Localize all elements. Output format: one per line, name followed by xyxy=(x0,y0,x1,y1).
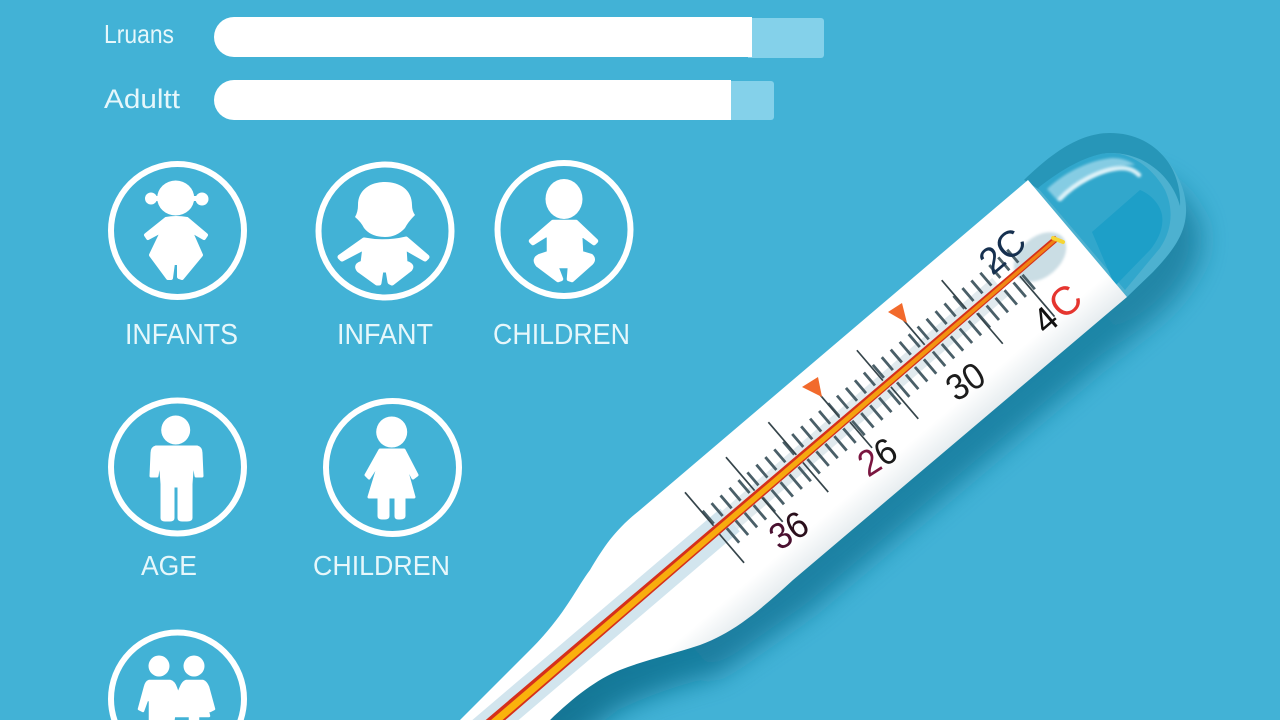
bar fill xyxy=(214,17,752,57)
faint tube behind ticks xyxy=(730,287,1000,520)
minor ticks upper xyxy=(707,254,1015,518)
scale in rotated axis coordinates xyxy=(684,214,1091,588)
thermometer shadow xyxy=(478,174,1202,720)
group: age xyxy=(111,400,244,581)
icon: girl in circle xyxy=(326,401,459,534)
icon: boy in circle xyxy=(111,400,244,534)
label: 2C: 2C xyxy=(971,220,1034,282)
marker: orange triangle xyxy=(888,303,907,323)
label: C red: C xyxy=(1040,276,1091,328)
minor ticks lower xyxy=(732,277,1035,536)
label: AGE: AGE xyxy=(141,550,197,581)
label: 30: 30 xyxy=(938,354,993,409)
pale tube band xyxy=(472,520,730,720)
tube end xyxy=(1004,222,1076,292)
label: 4: 4 xyxy=(1024,298,1066,342)
thermometer cap xyxy=(1024,133,1186,297)
icon: toddler in circle xyxy=(498,163,630,296)
label: 26: 26 xyxy=(850,430,904,485)
thermometer body xyxy=(455,180,1127,720)
icon: baby girl in circle xyxy=(111,164,244,297)
marker: orange triangle xyxy=(802,377,822,397)
bar fill xyxy=(214,80,731,120)
label: 36: 36 xyxy=(762,503,816,558)
label: INFANT: INFANT xyxy=(337,319,433,351)
label: Adult: Adultt xyxy=(104,84,181,114)
group: infant xyxy=(318,164,452,351)
bar: Adult xyxy=(104,80,774,120)
group: infants xyxy=(111,164,244,351)
label: CHILDREN: CHILDREN xyxy=(313,550,450,581)
label: CHILDREN: CHILDREN xyxy=(493,319,630,351)
label: Lruans: Lruans xyxy=(104,19,174,49)
icon: infant in circle xyxy=(318,164,452,298)
group: children xyxy=(493,163,630,351)
label: INFANTS: INFANTS xyxy=(125,319,238,351)
group: children 2 xyxy=(313,401,459,581)
bar remainder xyxy=(748,18,824,58)
thermometer xyxy=(455,133,1202,720)
mercury line xyxy=(468,236,1063,720)
bar: Lruans xyxy=(104,17,824,58)
icon: two children in circle xyxy=(111,632,244,720)
major ticks xyxy=(684,235,1055,574)
bar remainder xyxy=(728,81,774,120)
